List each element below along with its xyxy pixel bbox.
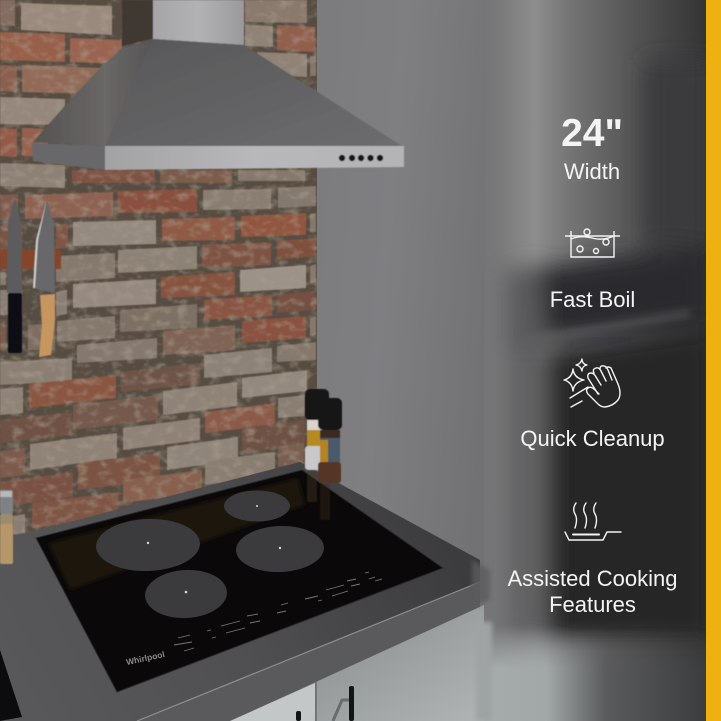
panel gradient [484, 0, 706, 721]
bottle reflection [307, 472, 330, 520]
handle bracket [333, 700, 350, 721]
icon: steaming pan [565, 503, 621, 540]
door gap [315, 682, 317, 721]
blurred appliance shapes [505, 60, 712, 640]
burner front right [235, 524, 325, 574]
lower bricks [0, 358, 307, 535]
counter front face [137, 582, 480, 721]
knife right [33, 199, 55, 357]
back wall [300, 0, 500, 721]
burner center marks [147, 505, 281, 593]
control marks [174, 572, 382, 651]
top-right bricks [245, 0, 316, 77]
width label: Width [564, 159, 620, 184]
bottle front [318, 398, 342, 483]
top-left bricks [0, 0, 305, 188]
burner front left [144, 568, 228, 620]
top right shadow [645, 60, 712, 245]
assisted cooking label: Assisted Cooking [508, 566, 677, 591]
lower panel light area [484, 629, 706, 721]
bottle rear [305, 389, 329, 470]
induction cooktop [36, 470, 443, 692]
yellow accent bar [706, 0, 721, 721]
blurred counter edge [472, 560, 490, 606]
24 inch heading: 24" [561, 112, 623, 155]
hood side band [32, 143, 105, 170]
knife left [7, 197, 22, 353]
feature: fast boil [550, 229, 635, 312]
assisted cooking label: Features [549, 592, 636, 617]
hood chimney [153, 0, 244, 45]
knife bar and knives [0, 197, 61, 357]
feature: quick cleanup [520, 359, 665, 451]
icon: wiping hand with sparkles [564, 359, 620, 407]
hood shadow on brick [122, 0, 154, 46]
brand logo: Whirlpool [125, 649, 166, 667]
quick cleanup label: Quick Cleanup [520, 426, 665, 451]
counter top surface [0, 462, 480, 721]
middle bricks [0, 186, 316, 378]
hood canopy front [105, 39, 402, 146]
hood buttons [339, 155, 383, 161]
blurred cabinet seam [476, 622, 492, 721]
spice bottles [305, 389, 342, 483]
cabinets [230, 605, 500, 721]
counter edge highlight [137, 582, 480, 721]
blurred side panel [472, 0, 712, 721]
hood canopy side [33, 39, 153, 146]
storage jar [0, 490, 13, 564]
brick reflection [48, 478, 305, 590]
cabinet left door [230, 683, 315, 721]
fast boil label: Fast Boil [550, 287, 635, 312]
feature: width [561, 112, 623, 184]
lower dark oven door [548, 330, 712, 640]
feature: assisted cooking [508, 503, 677, 617]
oven handle streak [520, 310, 690, 346]
upper frame [505, 265, 545, 350]
brick wall [0, 0, 317, 540]
hood front band [105, 146, 404, 170]
dark appliance corner [0, 650, 22, 721]
magnetic bar [0, 250, 61, 269]
icon: boiling pot [565, 229, 620, 257]
range hood [32, 0, 404, 170]
burner rear right [224, 490, 290, 522]
cabinet right door [316, 605, 500, 721]
handle left [296, 711, 301, 721]
upper dark oven door [540, 245, 712, 340]
burner rear left [95, 517, 201, 573]
handle right [349, 686, 354, 721]
cooktop glass [36, 470, 443, 692]
countertop [0, 462, 480, 721]
lower oven left frame [505, 345, 550, 640]
